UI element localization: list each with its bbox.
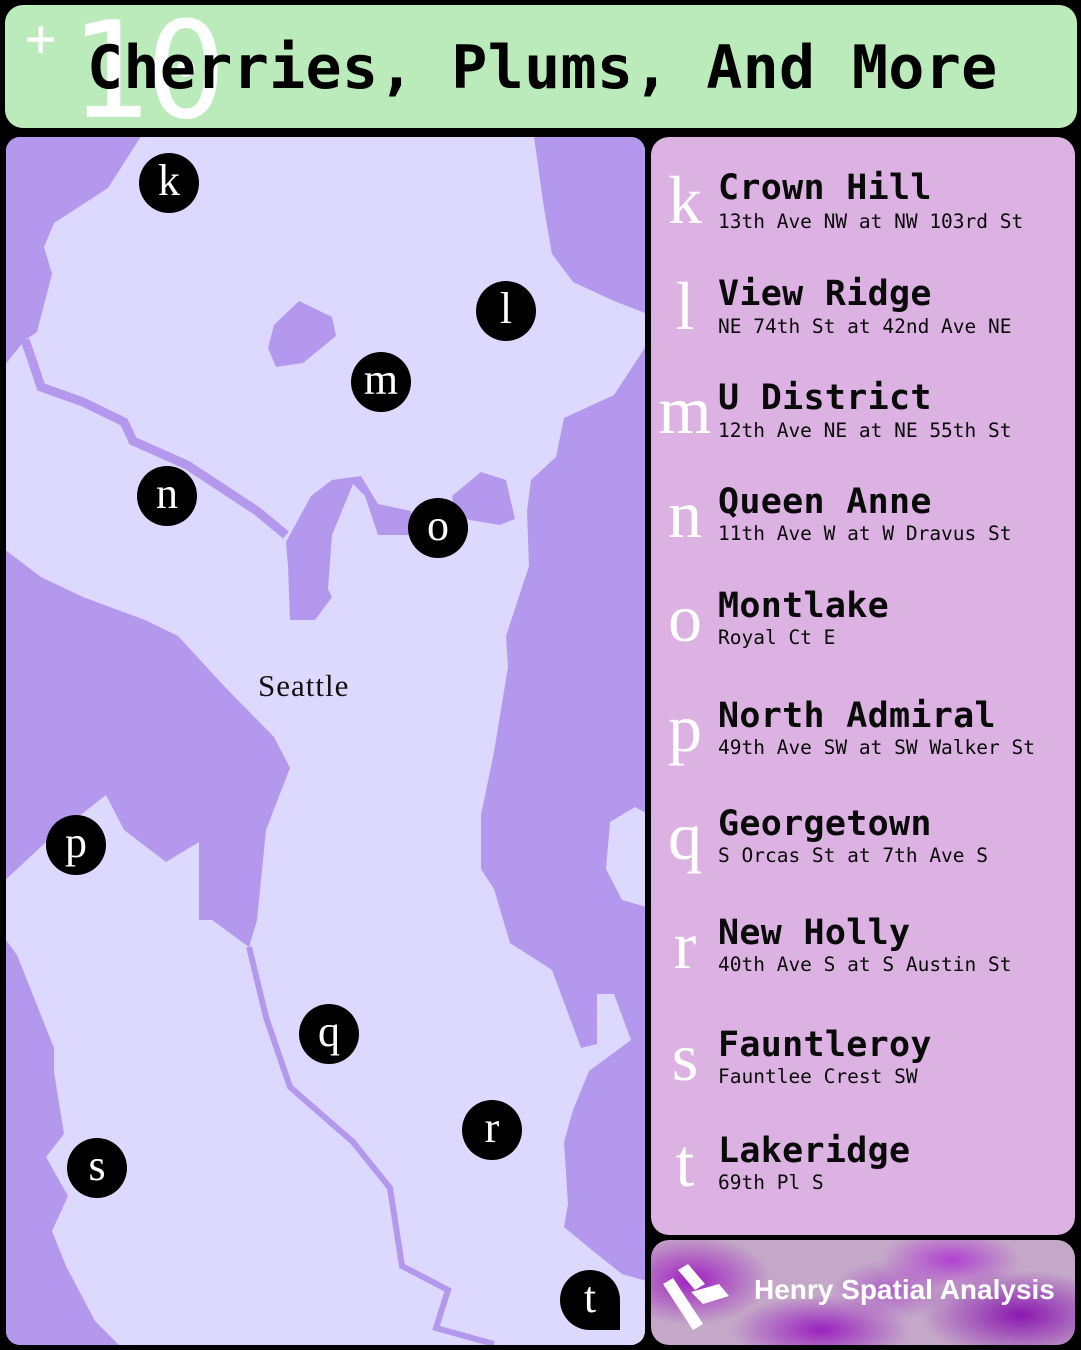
entry s [672, 1019, 932, 1095]
entry n: n [668, 476, 702, 552]
entry t: 69th Pl S [718, 1171, 824, 1194]
entry k [668, 162, 1023, 238]
entry r: 40th Ave S at S Austin St [718, 953, 1012, 976]
marker r [462, 1100, 522, 1160]
entry q [668, 798, 988, 874]
entry n: Queen Anne [718, 482, 932, 522]
entry p: 49th Ave SW at SW Walker St [718, 736, 1035, 759]
panel: map [6, 137, 645, 1345]
panel: location list [651, 137, 1075, 1235]
entry n [668, 476, 1012, 552]
marker t: t [584, 1273, 596, 1322]
entry m [659, 372, 1012, 448]
marker n: n [156, 469, 178, 518]
entry p [668, 690, 1035, 766]
entry m: 12th Ave NE at NE 55th St [718, 419, 1012, 442]
marker q: q [318, 1007, 340, 1056]
map markers [46, 153, 620, 1330]
entry k: Crown Hill [718, 168, 932, 208]
entry s: Fauntlee Crest SW [718, 1065, 918, 1088]
entry q: q [668, 798, 702, 874]
marker p: p [65, 818, 87, 867]
entry o: Montlake [718, 586, 889, 626]
map label: Seattle: Seattle [258, 668, 349, 703]
marker p [46, 815, 106, 875]
marker o: o [427, 501, 449, 550]
entry q: Georgetown [718, 804, 932, 844]
entry o: Royal Ct E [718, 626, 835, 649]
marker l [476, 281, 536, 341]
entry q: S Orcas St at 7th Ave S [718, 844, 988, 867]
marker o [408, 498, 468, 558]
marker n [137, 466, 197, 526]
marker k: k [158, 156, 180, 205]
title bar [5, 5, 1077, 128]
marker r: r [485, 1103, 499, 1152]
brand text: Henry Spatial Analysis [754, 1274, 1055, 1305]
marker m: m [364, 355, 398, 404]
entry o: o [668, 580, 702, 656]
marker m [351, 352, 411, 412]
entry p: North Admiral [718, 696, 996, 736]
entry t: t [676, 1125, 694, 1201]
entry o [668, 580, 889, 656]
entry m: U District [718, 378, 932, 418]
marker s [67, 1138, 127, 1198]
entry s: s [672, 1019, 698, 1095]
entry l: l [676, 268, 694, 344]
entry r: New Holly [718, 913, 910, 953]
marker k [139, 153, 199, 213]
entry s: Fauntleroy [718, 1025, 932, 1065]
entry l: View Ridge [718, 274, 932, 314]
entry l: NE 74th St at 42nd Ave NE [718, 315, 1012, 338]
entry p: p [668, 690, 702, 766]
entry r [674, 907, 1012, 983]
entry k: k [668, 162, 702, 238]
marker q [299, 1004, 359, 1064]
entry n: 11th Ave W at W Dravus St [718, 522, 1012, 545]
logo panel [651, 1240, 1075, 1345]
entry t [676, 1125, 910, 1201]
decorative number +10: + [25, 9, 56, 69]
marker s: s [88, 1141, 106, 1190]
entry t: Lakeridge [718, 1131, 910, 1171]
entry l [676, 268, 1012, 344]
entry k: 13th Ave NW at NW 103rd St [718, 210, 1023, 233]
icon: logo mark [663, 1264, 729, 1330]
entry m: m [659, 372, 711, 448]
marker t [560, 1270, 620, 1330]
title: Cherries, Plums, And More [87, 33, 998, 103]
marker l: l [500, 284, 512, 333]
entry r: r [674, 907, 696, 983]
